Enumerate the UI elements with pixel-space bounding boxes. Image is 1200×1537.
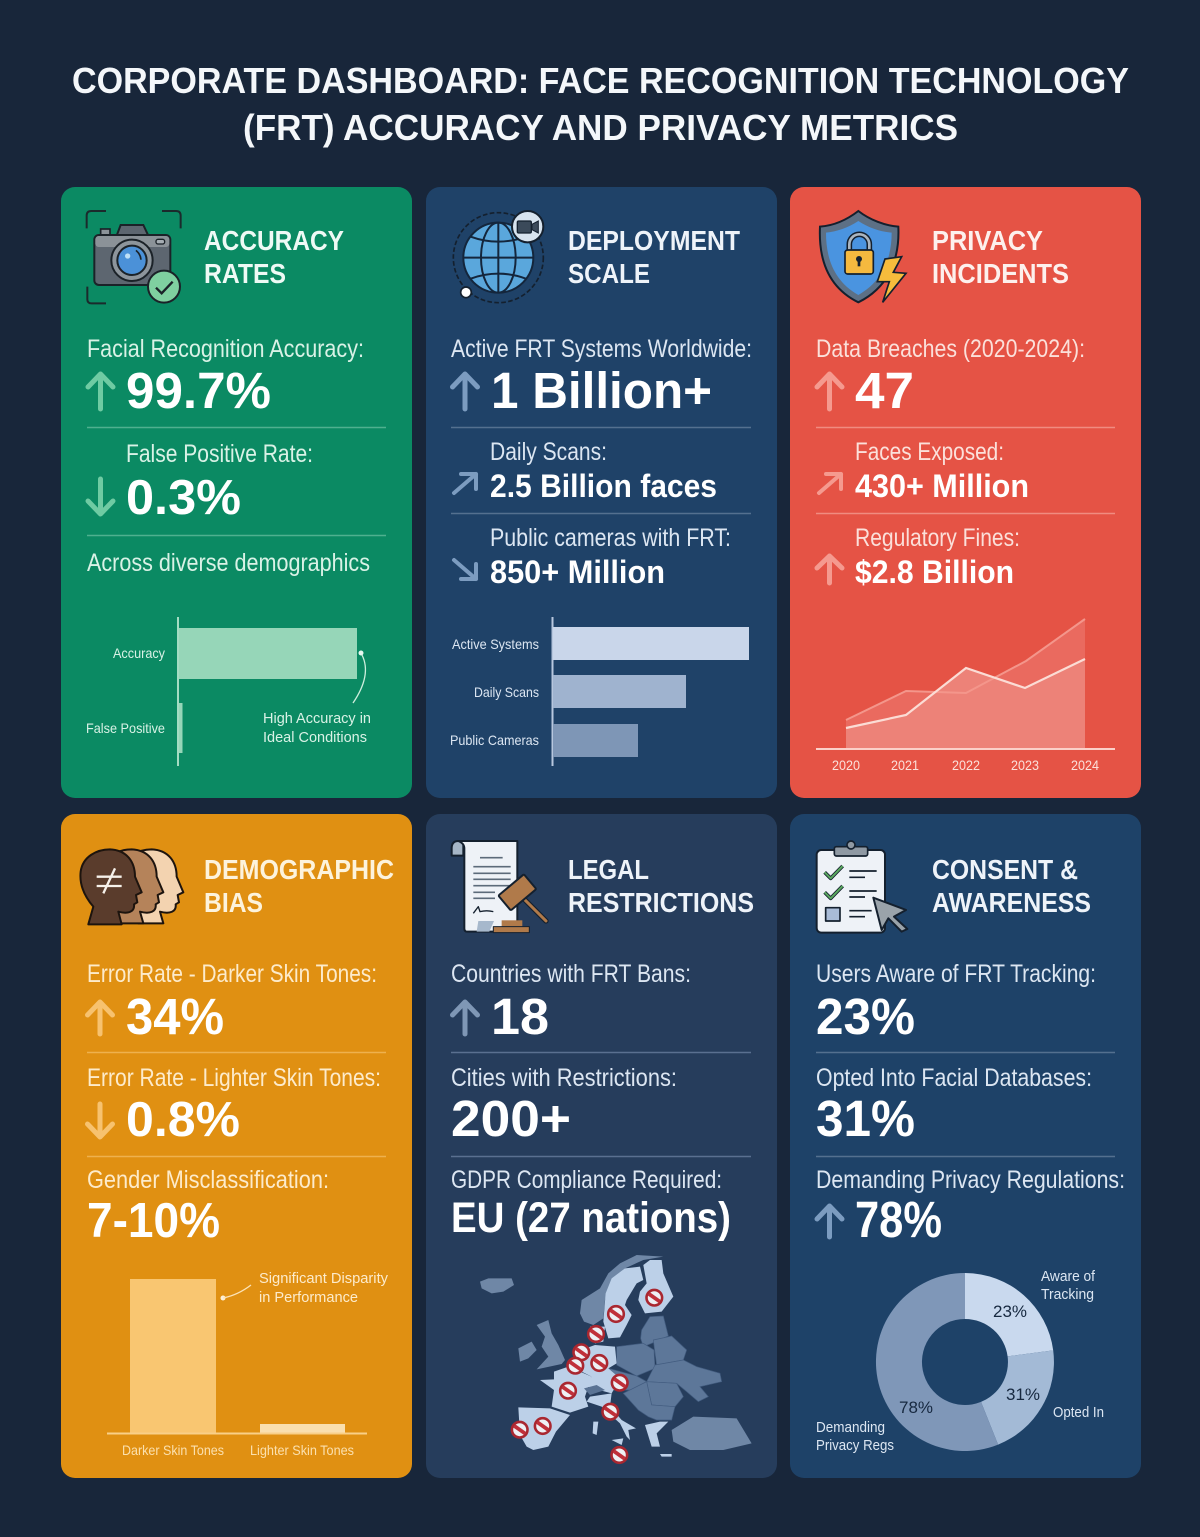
bar chart: error rate by skin tone: Lighter Skin Tones	[250, 1442, 354, 1458]
metric: daily scans	[454, 438, 717, 504]
bar chart: accuracy vs false positive: False Positive	[86, 720, 165, 736]
map: europe with ban markers	[480, 1255, 752, 1463]
area chart: incidents 2020-2024: 2022	[952, 757, 980, 773]
metric: cities with restrictions: 200+	[451, 1090, 571, 1147]
panel: accuracy rates	[61, 187, 412, 798]
icon: shield with lock and bolt	[820, 211, 906, 302]
panel: demographic bias	[61, 814, 412, 1478]
heading	[568, 225, 740, 289]
metric: active systems: Active FRT Systems Worldwide:	[451, 335, 752, 363]
metric: active systems: 1 Billion+	[491, 362, 712, 419]
metric: regulatory fines: $2.8 Billion	[855, 554, 1014, 590]
metric: false positive rate	[88, 440, 313, 525]
bar chart: accuracy vs false positive	[86, 617, 371, 766]
panel: privacy incidents	[790, 187, 1141, 798]
metric: faces exposed	[819, 438, 1029, 504]
icon: document and gavel	[452, 841, 546, 933]
bar chart: deployment	[450, 617, 749, 766]
heading: DEMOGRAPHIC	[204, 854, 394, 885]
metric: data breaches: Data Breaches (2020-2024):	[816, 335, 1085, 363]
bar chart: accuracy vs false positive: High Accuracy in	[263, 710, 371, 727]
panel background	[61, 187, 412, 798]
bar chart: deployment: Public Cameras	[450, 732, 539, 748]
metric: public cameras: Public cameras with FRT:	[490, 524, 731, 552]
metric: error rate lighter: 0.8%	[126, 1093, 240, 1147]
donut chart: consent: Demanding	[816, 1419, 885, 1436]
heading: BIAS	[204, 887, 263, 918]
heading: RATES	[204, 258, 286, 289]
metric: gender misclassification	[87, 1166, 329, 1248]
metric: daily scans: 2.5 Billion faces	[490, 468, 717, 504]
donut chart: consent: Opted In	[1053, 1404, 1104, 1421]
metric: public cameras	[454, 524, 731, 590]
metric: gdpr compliance	[451, 1166, 731, 1242]
metric: opted in: Opted Into Facial Databases:	[816, 1064, 1092, 1092]
metric: regulatory fines	[817, 524, 1020, 590]
panel background	[790, 814, 1141, 1478]
metric: users aware: 23%	[816, 988, 915, 1045]
metric: false positive rate: False Positive Rate:	[126, 440, 313, 468]
bar chart: error rate by skin tone	[107, 1270, 388, 1458]
bar chart: error rate by skin tone: Darker Skin Tones	[122, 1442, 224, 1458]
area chart: incidents 2020-2024	[816, 619, 1115, 773]
panel: legal restrictions	[426, 814, 777, 1478]
area chart: incidents 2020-2024: 2021	[891, 757, 919, 773]
heading: AWARENESS	[932, 887, 1091, 918]
metric: opted in	[816, 1064, 1092, 1147]
metric: facial recognition accuracy: 99.7%	[126, 362, 271, 419]
metric: users aware	[816, 960, 1096, 1045]
heading: DEPLOYMENT	[568, 225, 740, 256]
title: CORPORATE DASHBOARD: FACE RECOGNITION TECHNOLOGY	[72, 60, 1129, 101]
metric: error rate darker	[87, 960, 377, 1045]
metric: demanding regulations: Demanding Privacy Regulations:	[816, 1166, 1125, 1194]
donut chart: consent: 23%	[993, 1302, 1027, 1321]
metric: countries with bans: Countries with FRT Bans:	[451, 960, 691, 988]
heading: PRIVACY	[932, 225, 1043, 256]
bar chart: error rate by skin tone: in Performance	[259, 1289, 358, 1306]
metric: countries with bans	[451, 960, 691, 1045]
heading	[932, 854, 1091, 918]
title: (FRT) ACCURACY AND PRIVACY METRICS	[243, 107, 958, 148]
panel background	[426, 814, 777, 1478]
metric: gender misclassification: 7-10%	[87, 1194, 220, 1248]
metric: cities with restrictions: Cities with Restrictions:	[451, 1064, 677, 1092]
icon: camera with check	[87, 211, 181, 303]
donut chart: consent: Tracking	[1041, 1286, 1094, 1303]
metric: countries with bans: 18	[491, 988, 549, 1045]
title	[72, 60, 1129, 148]
metric: error rate lighter: Error Rate - Lighter Skin Tones:	[87, 1064, 381, 1092]
metric: data breaches	[816, 335, 1085, 419]
metric: facial recognition accuracy: Facial Recognition Accuracy:	[87, 335, 364, 363]
icon: globe with camera	[453, 211, 543, 303]
donut chart: consent: 31%	[1006, 1385, 1040, 1404]
heading	[568, 854, 754, 918]
text: across diverse demographics: Across diverse demographics	[87, 549, 370, 577]
panel background	[426, 187, 777, 798]
panel: deployment scale	[426, 187, 777, 798]
icon: clipboard with cursor	[817, 841, 907, 933]
donut chart: consent: Aware of	[1041, 1268, 1096, 1285]
metric: faces exposed: Faces Exposed:	[855, 438, 1004, 466]
metric: demanding regulations: 78%	[855, 1191, 942, 1248]
area chart: incidents 2020-2024: 2023	[1011, 757, 1039, 773]
heading: CONSENT &	[932, 854, 1078, 885]
panel: consent and awareness	[790, 814, 1141, 1478]
panel background	[61, 814, 412, 1478]
metric: public cameras: 850+ Million	[490, 554, 665, 590]
panel background	[790, 187, 1141, 798]
bar chart: deployment: Active Systems	[452, 636, 539, 652]
heading: SCALE	[568, 258, 650, 289]
donut chart: consent: 78%	[899, 1398, 933, 1417]
heading	[204, 225, 344, 289]
metric: daily scans: Daily Scans:	[490, 438, 607, 466]
heading: ACCURACY	[204, 225, 344, 256]
area chart: incidents 2020-2024: 2024	[1071, 757, 1099, 773]
metric: regulatory fines: Regulatory Fines:	[855, 524, 1020, 552]
area chart: incidents 2020-2024: 2020	[832, 757, 860, 773]
metric: demanding regulations	[816, 1166, 1125, 1248]
metric: error rate lighter	[87, 1064, 381, 1147]
metric: error rate darker: 34%	[126, 988, 224, 1045]
metric: gdpr compliance: EU (27 nations)	[451, 1194, 731, 1242]
heading	[932, 225, 1069, 289]
bar chart: accuracy vs false positive: Accuracy	[113, 645, 165, 661]
heading: INCIDENTS	[932, 258, 1069, 289]
metric: faces exposed: 430+ Million	[855, 468, 1029, 504]
bar chart: error rate by skin tone: Significant Disparity	[259, 1270, 388, 1287]
metric: users aware: Users Aware of FRT Tracking:	[816, 960, 1096, 988]
metric: error rate darker: Error Rate - Darker Skin Tones:	[87, 960, 377, 988]
metric: cities with restrictions	[451, 1064, 677, 1147]
heading: LEGAL	[568, 854, 649, 885]
metric: opted in: 31%	[816, 1090, 915, 1147]
heading: RESTRICTIONS	[568, 887, 754, 918]
metric: active systems	[451, 335, 752, 419]
metric: gdpr compliance: GDPR Compliance Required:	[451, 1166, 722, 1194]
metric: data breaches: 47	[855, 362, 914, 419]
heading	[204, 854, 394, 918]
donut chart: consent	[816, 1268, 1104, 1454]
metric: false positive rate: 0.3%	[126, 471, 241, 525]
bar chart: accuracy vs false positive: Ideal Conditions	[263, 729, 367, 746]
metric: gender misclassification: Gender Misclassification:	[87, 1166, 329, 1194]
metric: facial recognition accuracy	[87, 335, 364, 419]
donut chart: consent: Privacy Regs	[816, 1437, 894, 1454]
bar chart: deployment: Daily Scans	[474, 684, 539, 700]
icon: three heads with not-equal sign	[80, 849, 183, 924]
